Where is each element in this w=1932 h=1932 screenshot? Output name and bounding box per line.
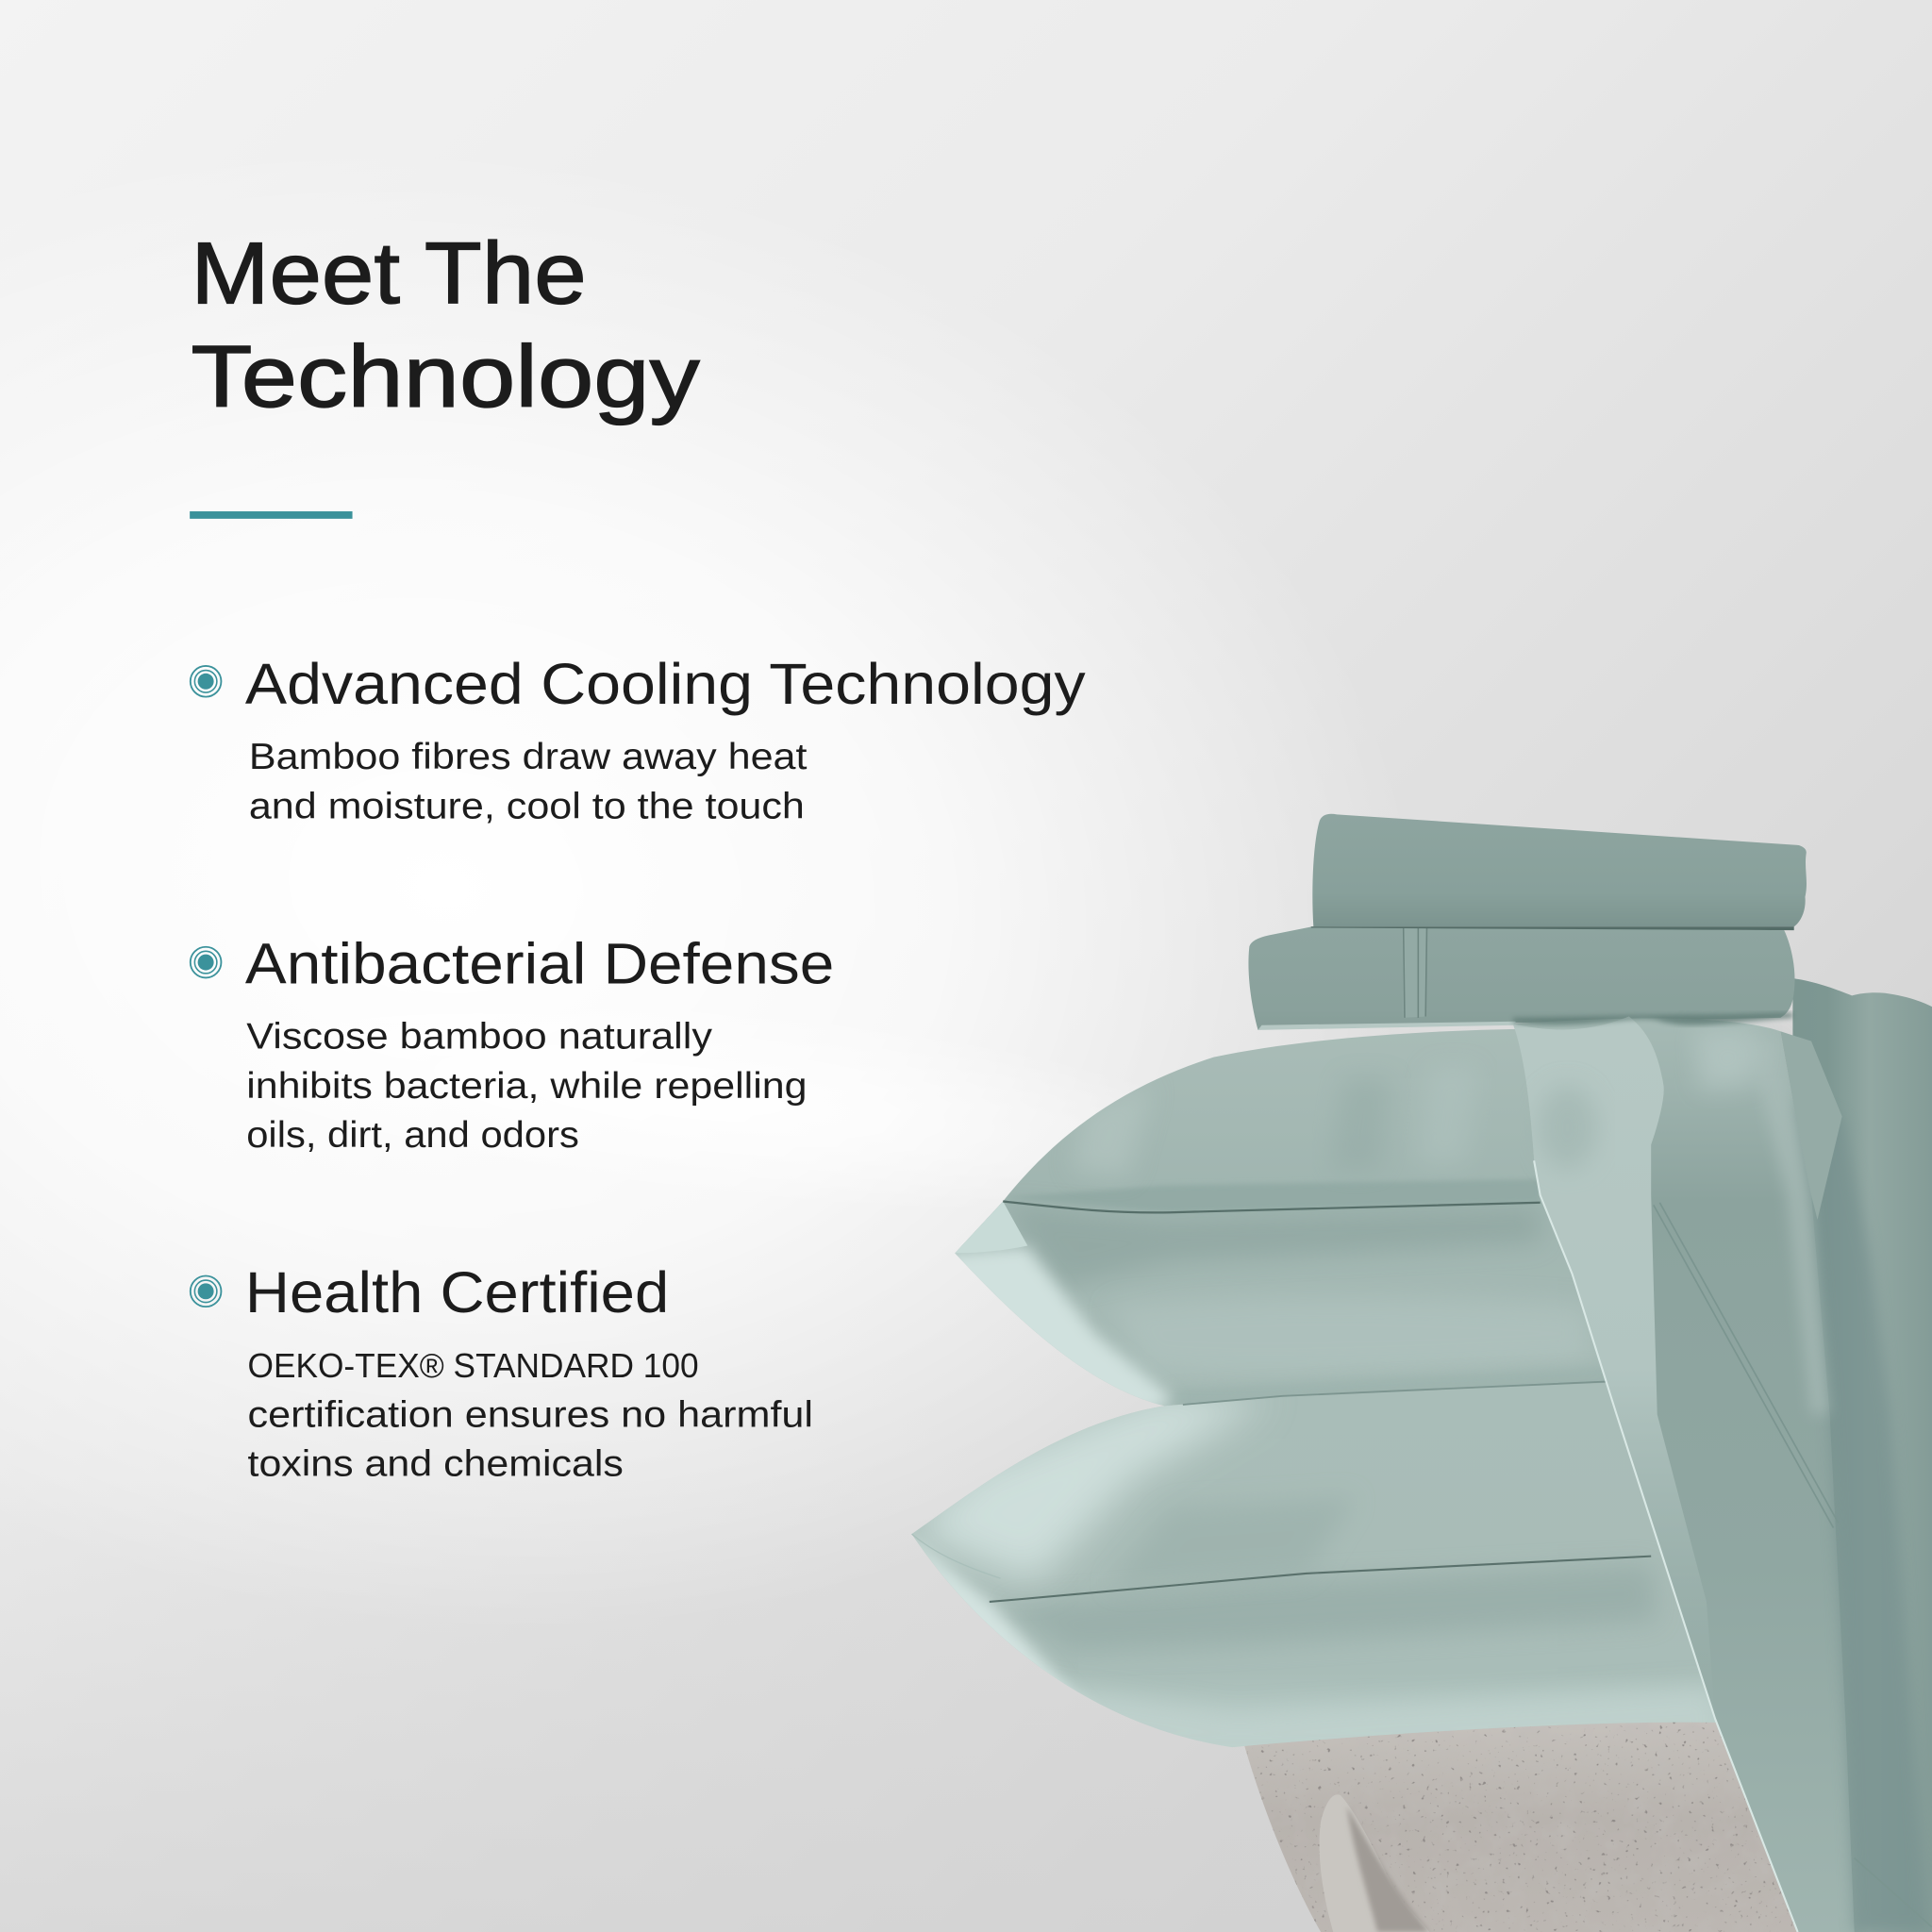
shadow between pillows	[1183, 1381, 1614, 1405]
title: Meet The	[191, 224, 587, 322]
sheet edge highlight	[1534, 1160, 1798, 1932]
feature: health	[191, 1260, 813, 1485]
folded sheet lower	[1248, 926, 1795, 1030]
title	[191, 224, 701, 425]
sheet hem seam	[1654, 1203, 1932, 1927]
body: antibacterial	[246, 1017, 808, 1156]
accent divider	[190, 511, 353, 519]
body: health: toxins and chemicals	[248, 1444, 624, 1485]
body: antibacterial: inhibits bacteria, while repelling	[246, 1066, 808, 1107]
upper pillow	[955, 1029, 1606, 1406]
dark back sheet	[1792, 978, 1932, 1932]
flap crease	[912, 1534, 1001, 1578]
heading: cooling: Advanced Cooling Technology	[245, 652, 1086, 717]
body: antibacterial: Viscose bamboo naturally	[246, 1017, 712, 1058]
product photo: bedding stack	[899, 814, 1932, 1932]
light turned-back panel	[1513, 1017, 1715, 1719]
body: cooling	[249, 737, 808, 826]
title: Technology	[191, 327, 701, 425]
draped sheet front	[1513, 1013, 1932, 1932]
body: antibacterial: oils, dirt, and odors	[246, 1115, 579, 1156]
icon: target bullet	[191, 666, 221, 697]
body: cooling: and moisture, cool to the touch	[249, 786, 805, 826]
heading: health: Health Certified	[245, 1260, 669, 1325]
shadow patch in panel	[1538, 1086, 1597, 1170]
feature: cooling	[191, 652, 1086, 826]
icon: target bullet	[191, 1275, 221, 1307]
lower pillow	[899, 1380, 1725, 1756]
folded sheet upper	[1311, 814, 1807, 930]
highlight on panel edge	[1768, 1072, 1832, 1414]
crease shadow under roll	[1513, 1013, 1792, 1025]
body: health: OEKO-TEX® STANDARD 100	[248, 1346, 699, 1385]
icon: target bullet	[191, 947, 221, 977]
concrete block	[1242, 1707, 1802, 1932]
body: health: certification ensures no harmful	[248, 1394, 813, 1435]
feature: antibacterial	[191, 931, 834, 1156]
pillow seam	[990, 1557, 1651, 1602]
side fold	[1780, 1031, 1842, 1220]
body: health	[248, 1346, 813, 1485]
dark fold strip	[1792, 1100, 1928, 1932]
heading: antibacterial: Antibacterial Defense	[245, 931, 834, 996]
pillow seam	[1003, 1201, 1541, 1212]
body: cooling: Bamboo fibres draw away heat	[249, 737, 808, 777]
